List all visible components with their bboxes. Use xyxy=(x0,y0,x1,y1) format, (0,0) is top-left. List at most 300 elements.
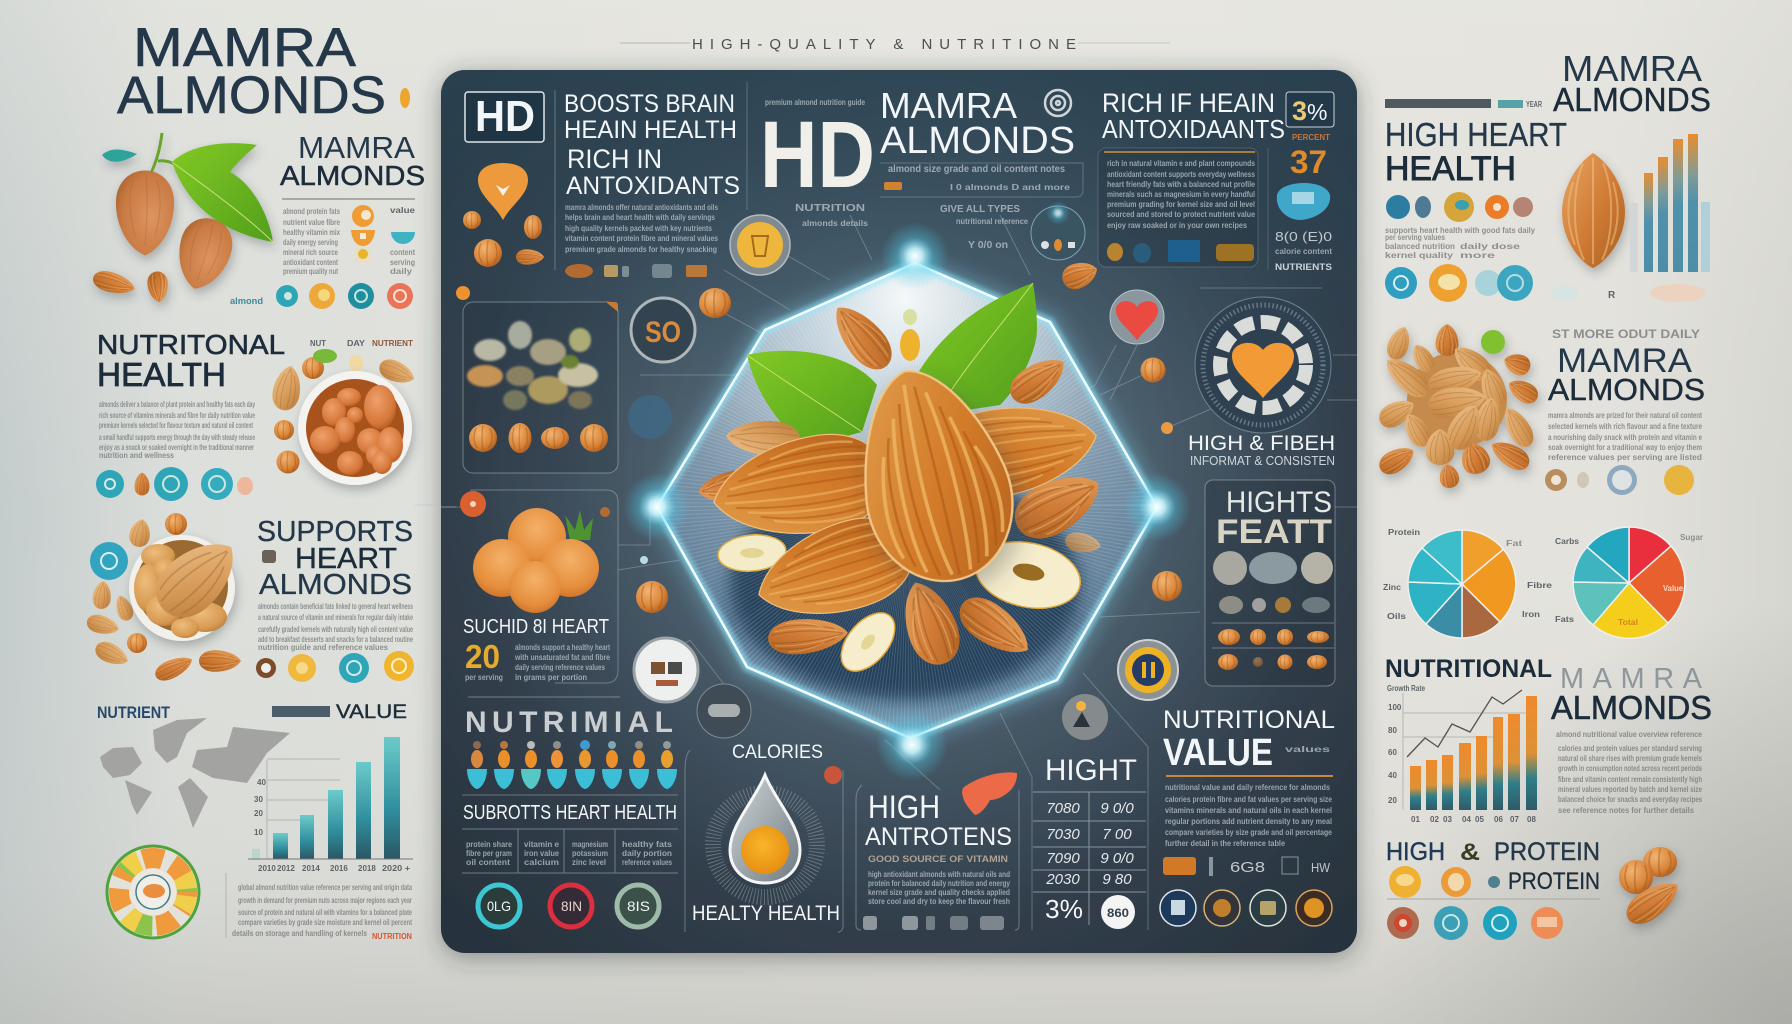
text block with icons: daily energy serving xyxy=(283,238,338,247)
HD badge: HD xyxy=(475,92,535,141)
panel: rich in antioxidants xyxy=(1098,88,1334,272)
panel: nut collage xyxy=(456,286,618,473)
heading: Supports Heart Almonds: SUPPORTS xyxy=(257,516,413,548)
text block: a small handful supports energy through the day with steady release xyxy=(99,433,255,442)
combo chart: 80 xyxy=(1388,726,1397,735)
text block: vitamin content protein fibre and mineral values xyxy=(565,234,718,243)
icon: dark medallion xyxy=(631,298,695,362)
text block with icons: nutrient value fibre xyxy=(283,218,340,227)
percent badge: % xyxy=(1307,99,1327,125)
bar chart: 2018 xyxy=(358,864,376,873)
small icons xyxy=(565,264,707,278)
text block: global almond nutrition value reference per serving and origin data xyxy=(238,883,412,892)
panel: nutritional figures xyxy=(462,697,678,927)
bar chart: 2020 + xyxy=(382,864,410,873)
data table: 860 xyxy=(1107,906,1129,920)
heading: Mamra Almonds faded xyxy=(1551,663,1712,726)
heading: High Heart Health: HIGH HEART xyxy=(1385,116,1567,153)
text block: almond nutritional value overview reference xyxy=(1556,730,1702,739)
text block: compare varieties by size grade and oil percentage xyxy=(1165,828,1332,837)
heading: Supports Heart Almonds: HEART xyxy=(295,543,397,575)
illustration: almonds with leaf xyxy=(91,133,273,303)
heading: High Protein: PROTEIN xyxy=(1494,838,1600,866)
text block with icons: value xyxy=(390,206,416,215)
heading: Nutritional Health xyxy=(97,329,285,393)
heading: Nutrition Value: VALUE xyxy=(336,702,407,723)
main title: ALMONDS xyxy=(117,66,386,125)
panel: height table xyxy=(1033,754,1146,929)
heading xyxy=(1163,706,1335,774)
data table: 3% xyxy=(1045,894,1083,924)
bar chart: 30 xyxy=(254,795,263,804)
text block: almonds deliver a balance of plant protein and healthy fats each day xyxy=(99,400,255,409)
icon row: almond xyxy=(230,296,263,306)
central big almond xyxy=(835,352,1031,598)
text block xyxy=(868,854,1010,906)
panel: HD Mamra Almonds title: premium almond nutrition guide xyxy=(765,98,865,107)
heading: HIGH xyxy=(868,789,940,825)
text block: almonds contain beneficial fats linked to general heart wellness xyxy=(258,602,413,611)
bar chart xyxy=(1630,134,1710,272)
text block: store cool and dry to keep the flavour fresh xyxy=(868,897,1010,906)
bar chart xyxy=(248,737,413,873)
heading: Mamra Almonds xyxy=(1553,48,1711,118)
captions: GIVE ALL TYPES xyxy=(940,204,1020,215)
captions: nutritional reference xyxy=(956,217,1029,226)
text block with icons: antioxidant content xyxy=(283,258,338,267)
text block: high quality kernels packed with key nutrients xyxy=(565,224,712,233)
badge: cyan xyxy=(478,885,520,927)
small icons xyxy=(863,916,1004,930)
stats column: NUTRIENTS xyxy=(1275,262,1332,272)
octagon texture xyxy=(657,263,1157,738)
data table: 7090 xyxy=(1046,850,1080,867)
info table: oil content xyxy=(466,858,510,867)
text block: a natural source of vitamin and minerals for regular daily intake xyxy=(258,613,413,622)
heading: Supports Heart Almonds: ALMONDS xyxy=(259,569,412,601)
info table: zinc level xyxy=(572,858,606,867)
text block: details on storage and handling of kernels xyxy=(232,929,367,938)
icon: dark medallion: SO xyxy=(645,316,681,349)
badge: green xyxy=(617,885,659,927)
stat: 20: 20 xyxy=(465,638,500,675)
top banner title: HIGH-QUALITY & NUTRITIONE xyxy=(692,36,1076,53)
pie chart 2 xyxy=(1555,527,1703,638)
small icons: 6G8 xyxy=(1230,859,1265,876)
text block xyxy=(1556,730,1702,815)
text block: reference values per serving are listed xyxy=(1548,453,1702,462)
caption box xyxy=(880,163,1083,197)
text block xyxy=(1548,411,1702,462)
heading: boosts brain: HEAIN HEALTH xyxy=(564,116,737,144)
bar chart: 40 xyxy=(257,778,266,787)
heading: Mamra Almonds xyxy=(1548,342,1705,407)
text block: kernel size grade and quality checks applied xyxy=(868,888,1010,897)
heading: High Protein: HIGH xyxy=(1386,838,1445,866)
main dark panel xyxy=(415,70,1357,953)
bar chart: 10 xyxy=(254,828,263,837)
pie chart 2: Sugar xyxy=(1680,533,1703,542)
light flares xyxy=(623,222,1191,781)
heading xyxy=(1216,486,1332,551)
heading: Mamra Almonds: ALMONDS xyxy=(1553,81,1711,118)
badge: cyan: 0LG xyxy=(487,898,511,914)
text block: almonds support a healthy heart xyxy=(515,643,610,652)
small label strip: YEAR xyxy=(1526,100,1542,109)
pie chart 1 xyxy=(1383,528,1553,638)
text block: helps brain and heart health with daily servings xyxy=(565,213,715,222)
text block: carefully graded kernels with naturally high oil content value xyxy=(258,625,413,634)
panel: highlights features xyxy=(1205,480,1335,686)
text block: further detail in the reference table xyxy=(1165,839,1285,848)
text block: high antioxidant almonds with natural oils and xyxy=(868,870,1010,879)
collage image xyxy=(467,321,598,410)
text block: vitamins minerals and natural oils in each kernel xyxy=(1165,806,1332,815)
text box: rich in natural vitamin e and plant compounds xyxy=(1107,159,1255,168)
text block: nutrition guide and reference values xyxy=(258,643,389,652)
text block: mineral values reported by batch and kernel size xyxy=(1558,785,1702,794)
text block: with unsaturated fat and fibre xyxy=(514,653,610,662)
combo chart: 40 xyxy=(1388,771,1397,780)
text block with icons: daily xyxy=(390,267,413,276)
bottom almonds and slices xyxy=(767,533,1086,681)
floating medallions and nuts, upper area xyxy=(628,257,1335,468)
text block: kernel quality xyxy=(1385,251,1454,260)
text box xyxy=(1098,148,1258,267)
large almond xyxy=(1562,153,1625,268)
heading: Mamra Almonds faded: MAMRA xyxy=(1560,663,1703,695)
heading: Nutritional Health: HEALTH xyxy=(97,356,226,393)
text block: calories and protein values per standard serving xyxy=(1558,744,1702,753)
heading: boosts brain xyxy=(564,90,740,200)
heading: NUTRITIONAL xyxy=(1163,706,1335,734)
text block: enjoy as a snack or soaked overnight in the traditional manner xyxy=(99,443,254,452)
text block: a nourishing daily snack with protein and vitamin e xyxy=(1548,433,1702,442)
icon: red mitt xyxy=(962,772,1017,815)
combo chart: 07 xyxy=(1510,815,1519,824)
combo chart: 20 xyxy=(1388,796,1397,805)
combo chart: 06 xyxy=(1494,815,1503,824)
pale sketches xyxy=(1552,284,1706,302)
heading: Mamra Almonds: ALMONDS xyxy=(280,160,425,191)
text block xyxy=(565,203,718,254)
text block: supports heart health with good fats daily xyxy=(1385,226,1536,235)
captions: almonds details xyxy=(802,219,869,228)
combo chart: 03 xyxy=(1443,815,1452,824)
text block: mamra almonds offer natural antioxidants and oils xyxy=(565,203,718,212)
text block: more xyxy=(1460,251,1496,260)
icon: drop with yolk xyxy=(713,775,817,897)
text block: balanced nutrition xyxy=(1385,242,1455,251)
text block xyxy=(226,873,412,941)
heading xyxy=(865,789,1012,851)
four nuts xyxy=(469,423,608,453)
icons xyxy=(1387,866,1600,940)
text box: antioxidant content supports everyday wellness xyxy=(1107,170,1255,179)
heading: boosts brain: BOOSTS BRAIN xyxy=(564,90,735,118)
panel: suchid heart xyxy=(441,490,618,683)
combo chart: 05 xyxy=(1475,815,1484,824)
badge: red: 8IN xyxy=(561,898,582,914)
figure row xyxy=(467,740,677,789)
text block xyxy=(99,400,255,460)
data table: 9 0/0 xyxy=(1100,850,1134,867)
icon: amber lamp xyxy=(1062,694,1108,740)
icon row xyxy=(230,283,413,309)
small nuts xyxy=(463,211,544,267)
heading: ANTOXIDAANTS xyxy=(1102,114,1285,144)
text block: add to breakfast desserts and snacks for a balanced routine xyxy=(258,635,413,644)
text block: GOOD SOURCE OF VITAMIN xyxy=(868,854,1008,864)
text box: sourced and stored to protect nutrient value xyxy=(1107,210,1255,219)
pie chart 2: Fats xyxy=(1555,615,1575,624)
small icons: HW xyxy=(1311,860,1331,875)
text block: mamra almonds are prized for their natural oil content xyxy=(1548,411,1702,420)
icon: spiral xyxy=(1045,90,1071,116)
icon: heart bubble xyxy=(1110,290,1164,344)
text block: per serving values xyxy=(1385,233,1445,242)
small icons xyxy=(1163,857,1331,876)
nut rows xyxy=(1218,629,1329,670)
panel: nutritional value xyxy=(1160,706,1335,926)
text block with icons: premium quality nut xyxy=(283,267,338,276)
orange dot xyxy=(456,286,470,300)
heading: High Protein: & xyxy=(1460,839,1480,866)
icon: gold medallion xyxy=(730,215,790,275)
text block: NUTRITION xyxy=(372,932,412,941)
heading: SUCHID 8I HEART xyxy=(463,616,609,638)
heading: high and fibre: HIGH & FIBEH xyxy=(1188,432,1335,455)
heading: FEATT xyxy=(1216,513,1332,551)
heading: Mamra Almonds: ALMONDS xyxy=(1548,372,1705,407)
icon: bowl of nuts: NUT xyxy=(310,339,326,348)
panel: high antrotens xyxy=(856,772,1019,930)
text block: per serving xyxy=(465,673,503,682)
combo chart: 100 xyxy=(1388,703,1402,712)
badge: green: 8IS xyxy=(627,898,650,914)
heading: supports heart health: SUBROTTS HEART HEALTH xyxy=(463,802,677,824)
heading: boosts brain: RICH IN xyxy=(567,144,662,174)
text block: daily dose xyxy=(1460,242,1521,251)
text block: soak overnight for a traditional way to enjoy them xyxy=(1548,443,1702,452)
data table: 7030 xyxy=(1046,826,1080,843)
illustration: almond cluster xyxy=(1375,324,1542,489)
pie chart 2: Carbs xyxy=(1555,537,1580,546)
icon: bowl of nuts: DAY xyxy=(347,339,366,348)
main title: MAMRA xyxy=(133,16,356,78)
heading: Nutrition Value xyxy=(97,702,407,723)
caption box: I 0 almonds D and more xyxy=(950,183,1071,192)
text block with icons: almond protein fats xyxy=(283,207,340,216)
small label strip xyxy=(1385,99,1542,109)
illustration: orange balls xyxy=(473,508,599,613)
heading: RICH IF HEAIN xyxy=(1102,88,1275,118)
combo chart: 60 xyxy=(1388,748,1397,757)
text block with icons: mineral rich source xyxy=(283,248,338,257)
lower left big almond xyxy=(745,504,925,636)
heading: VALUE xyxy=(1163,732,1273,774)
text block: growth in demand for premium nuts across major regions each year xyxy=(238,896,412,905)
icon: nutrition wheel xyxy=(106,845,200,939)
text block: fibre and vitamin content remain consistently high xyxy=(1558,775,1702,784)
text block: compare varieties by grade size moisture and kernel oil percent xyxy=(238,918,412,927)
floating icons, lower left xyxy=(634,556,1182,740)
stats column xyxy=(1275,133,1332,272)
green leaves xyxy=(747,283,1037,444)
heading: High Protein xyxy=(1386,838,1600,895)
text box: enjoy raw soaked or in your own recipes xyxy=(1107,221,1247,230)
stats column: PERCENT xyxy=(1292,133,1330,142)
left column xyxy=(85,16,425,941)
heading: ANTROTENS xyxy=(865,823,1012,851)
text block: selected kernels with rich flavour and a fine texture xyxy=(1548,422,1702,431)
pie chart 1: Iron xyxy=(1522,610,1540,619)
text block: growth in consumption noted across recent periods xyxy=(1558,764,1702,773)
icon row xyxy=(1545,465,1694,495)
combo chart xyxy=(1387,684,1537,824)
heading: Mamra Almonds: MAMRA xyxy=(1562,48,1702,89)
text block xyxy=(1385,226,1536,260)
text block: in grams per portion xyxy=(515,673,587,682)
icon: heart dial xyxy=(1195,297,1331,433)
data table: 7 00 xyxy=(1102,826,1132,843)
caption box: almond size grade and oil content notes xyxy=(888,164,1065,175)
world map xyxy=(100,718,290,828)
info table: healthy fats xyxy=(622,840,673,849)
text block with icons: serving xyxy=(390,258,415,267)
combo chart: 04 xyxy=(1462,815,1471,824)
info table: daily portion xyxy=(622,849,672,858)
icon: bowl of nuts xyxy=(270,339,418,485)
heading: Nutrition Value: NUTRIENT xyxy=(97,703,171,722)
icon: glass bubble xyxy=(1031,201,1085,260)
info table: fibre per gram xyxy=(466,849,512,858)
heading: Nutritional: NUTRITIONAL xyxy=(1385,655,1552,683)
captions: Y 0/0 on xyxy=(968,240,1008,251)
pie chart 1: Oils xyxy=(1387,612,1407,621)
heading: NUTRIMIAL xyxy=(465,706,673,739)
heading: Nutritional Health: NUTRITONAL xyxy=(97,329,285,360)
captions: NUTRITION xyxy=(795,203,865,214)
heading: High Heart Health: HEALTH xyxy=(1385,150,1516,188)
data table: 2030 xyxy=(1045,871,1080,888)
stats column: calorie content xyxy=(1275,247,1332,256)
text block: nutritional value and daily reference for almonds xyxy=(1165,783,1330,792)
heading: values xyxy=(1285,745,1331,754)
bar chart: 2010 xyxy=(258,864,276,873)
text block: natural oil share rises with premium grade kernels xyxy=(1558,754,1702,763)
heading: CALORIES xyxy=(732,742,823,763)
data table: 7080 xyxy=(1046,800,1080,817)
heading xyxy=(880,85,1075,162)
illustration: bowl of almonds xyxy=(85,513,250,685)
heading: Mamra Almonds faded: ALMONDS xyxy=(1551,689,1712,726)
text block: calories protein fibre and fat values per serving size xyxy=(1165,795,1332,804)
text block with icons: content xyxy=(390,248,415,257)
data table: 9 80 xyxy=(1102,871,1132,888)
bar chart: 2016 xyxy=(330,864,348,873)
icon row xyxy=(1385,264,1533,302)
small almonds and slices xyxy=(696,296,1111,556)
info table: magnesium xyxy=(572,840,608,849)
almond slices xyxy=(717,532,787,574)
icon: glass lens xyxy=(697,684,751,738)
side almonds xyxy=(705,393,1104,549)
heading: High Heart Health xyxy=(1385,116,1567,188)
heading: MAMRA xyxy=(880,85,1017,126)
illustration: almonds xyxy=(1619,847,1686,931)
heading: Mamra Almonds: MAMRA xyxy=(298,130,415,165)
pie chart 2: Value xyxy=(1663,584,1684,593)
icon: orange pin xyxy=(478,163,528,220)
grey photos xyxy=(1213,551,1333,614)
text box: minerals such as magnesium in every handful xyxy=(1107,190,1255,199)
text block: daily serving reference values xyxy=(515,663,605,672)
text block with icons xyxy=(282,199,416,276)
text box: heart friendly fats with a balanced nut profile xyxy=(1107,180,1255,189)
panel: top left HD and benefits xyxy=(463,90,740,278)
data table: 9 0/0 xyxy=(1100,800,1134,817)
heading: Mamra Almonds xyxy=(280,130,425,191)
caption: HEALTY HEALTH xyxy=(692,902,840,925)
heading: Supports Heart Almonds xyxy=(257,516,413,601)
combo chart: Growth Rate xyxy=(1387,684,1425,693)
stats column: 8(0 (E)0 xyxy=(1275,229,1332,244)
bar chart: 2012 xyxy=(277,864,295,873)
text box: premium grading for kernel size and oil level xyxy=(1107,200,1255,209)
bar chart: 2014 xyxy=(302,864,320,873)
icon: bowl of nuts: NUTRIENT xyxy=(372,339,413,348)
text block: nutrition and wellness xyxy=(99,451,174,460)
percent badge xyxy=(1286,92,1334,127)
icon row xyxy=(1386,192,1533,222)
text block: balanced choice for snacks and everyday recipes xyxy=(1558,795,1702,804)
info table: potassium xyxy=(572,849,608,858)
heading: HIGHT xyxy=(1045,754,1137,787)
main title xyxy=(117,16,410,125)
info table xyxy=(462,829,678,873)
pie chart 1: Protein xyxy=(1388,528,1420,537)
info table: calcium xyxy=(524,858,559,867)
captions xyxy=(795,203,1029,251)
text block: premium kernels selected for flavour texture and natural oil content xyxy=(99,421,253,430)
info table: reference values xyxy=(622,858,672,867)
pie chart 1: Fat xyxy=(1506,539,1522,548)
combo chart: 01 xyxy=(1411,815,1420,824)
text block: rich source of vitamins minerals and fibre for daily nutrition value xyxy=(99,411,255,420)
central octagon with almonds xyxy=(623,222,1191,781)
right column xyxy=(1375,48,1712,940)
text block xyxy=(258,602,413,652)
icon: white medallion xyxy=(634,638,698,702)
text block with icons: healthy vitamin mix xyxy=(283,228,340,237)
info table: iron value xyxy=(524,849,560,858)
text block: protein for balanced daily nutrition and energy xyxy=(868,879,1010,888)
icon row xyxy=(96,467,253,501)
heading: High Protein: PROTEIN xyxy=(1508,868,1600,895)
panel: HD Mamra Almonds title xyxy=(730,82,1085,275)
heading: boosts brain: ANTOXIDANTS xyxy=(566,172,740,200)
combo chart: 02 xyxy=(1430,815,1439,824)
text block xyxy=(465,643,610,682)
text block: regular portions add nutrient density to any meal xyxy=(1165,817,1332,826)
stats column: 37 xyxy=(1290,144,1327,180)
heading: high and fibre: INFORMAT & CONSISTEN xyxy=(1190,453,1335,468)
icon row xyxy=(256,651,414,683)
large HD: HD xyxy=(760,102,875,208)
heading: Mamra Almonds: MAMRA xyxy=(1557,342,1692,380)
text block: premium grade almonds for healthy snacking xyxy=(565,245,717,254)
